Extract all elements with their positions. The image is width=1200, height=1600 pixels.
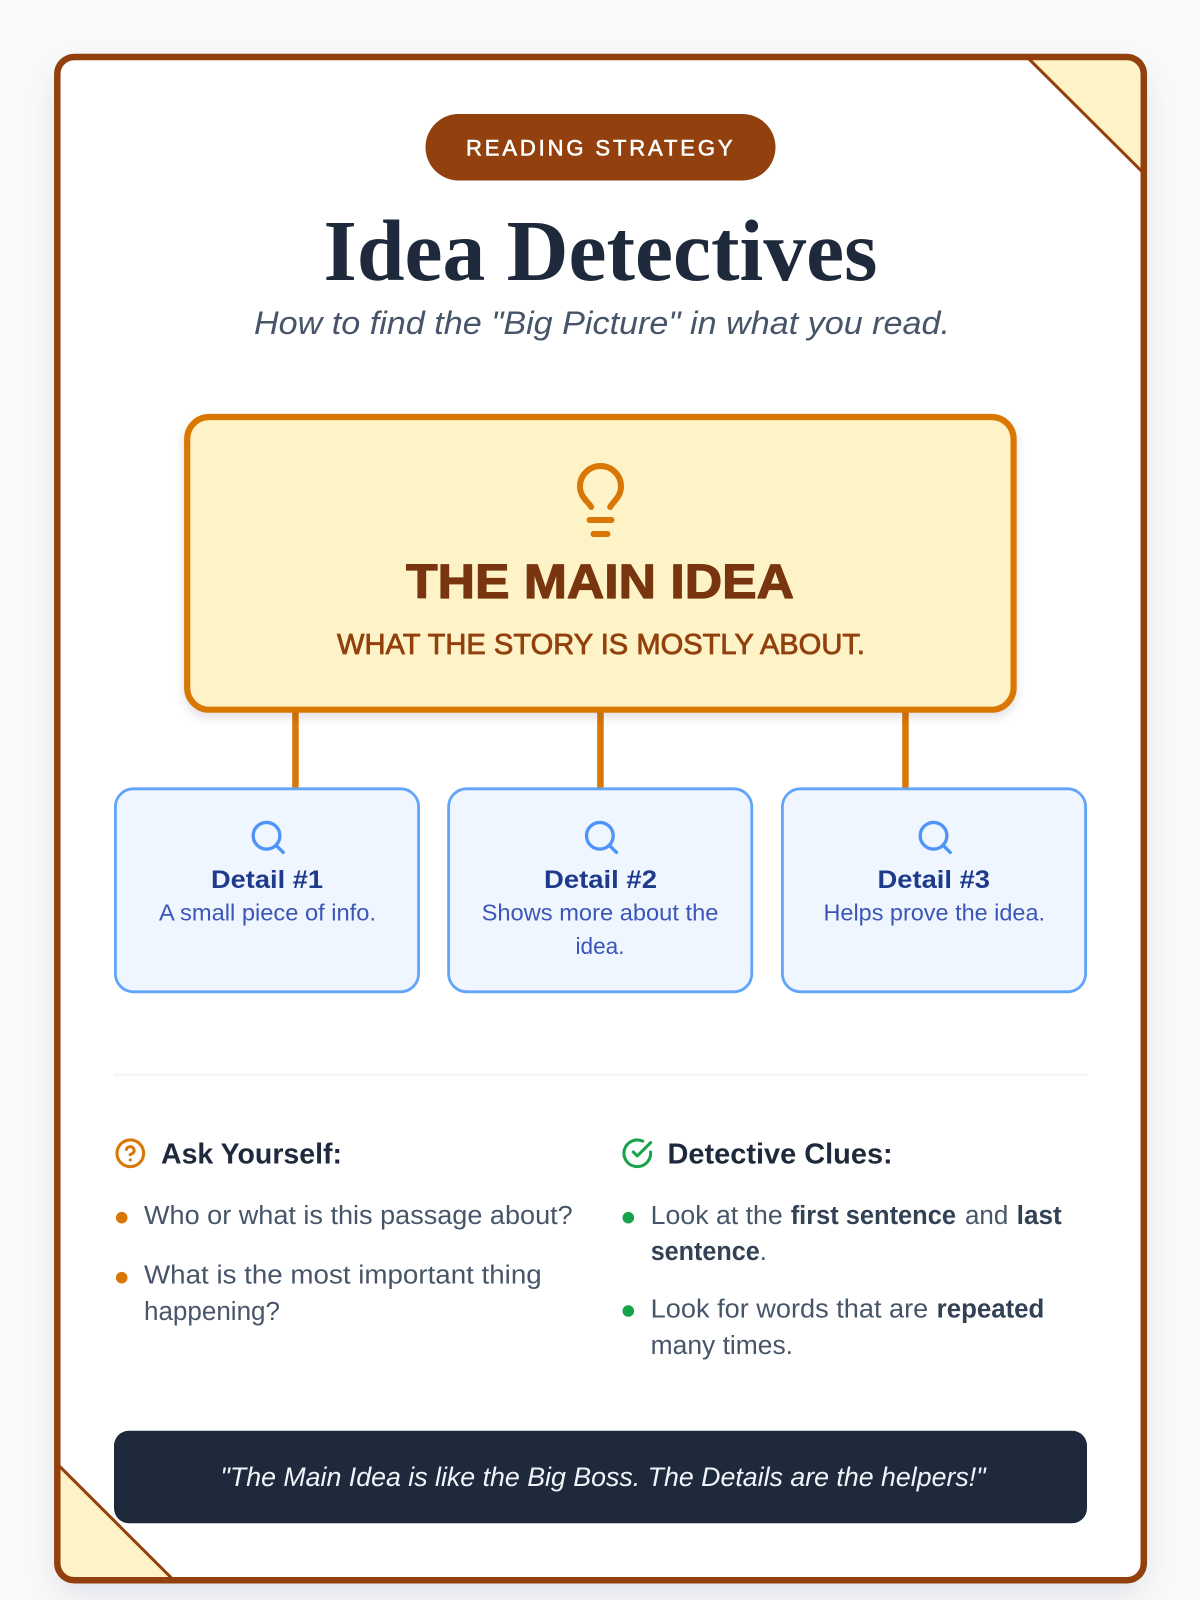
detail 2 text [482,900,718,959]
clues bullet 2: repeated [937,1295,1044,1323]
icon: check circle [624,1140,651,1167]
clues bullet 2: Look for words that are [651,1295,928,1323]
clues bullet 1: Look at the [651,1202,783,1230]
icon: lightbulb [580,466,621,534]
icon: magnifier 2 [587,822,617,852]
detail 2 text: Shows more about the [482,900,718,926]
detail 1 heading: Detail #1 [211,866,323,894]
ask yourself bullet 2: What is the most important thing [144,1261,542,1289]
detail 3 heading: Detail #3 [878,866,990,894]
panel: detail 1 [115,789,419,992]
icon: magnifier 1 [253,822,283,852]
detail 1 text: A small piece of info. [159,900,376,926]
clues bullet 2 [622,1295,1044,1360]
clues bullet 2: many times. [651,1332,793,1360]
clues bullet 1: sentence [651,1238,760,1266]
clues bullet 1: first sentence [791,1202,956,1230]
connector lines [292,710,909,790]
ask yourself bullet 2: happening? [144,1298,280,1326]
title: Idea Detectives [324,202,878,299]
corner: bottom left [58,1465,174,1580]
detail 3 text: Helps prove the idea. [824,900,1045,926]
icon: question circle [117,1140,144,1167]
ask yourself heading: Ask Yourself: [161,1138,342,1170]
main idea heading: THE MAIN IDEA [406,556,794,609]
badge: reading strategy [426,114,776,180]
panel: main idea [187,417,1014,710]
detective clues heading: Detective Clues: [668,1138,893,1170]
clues bullet 1: and [965,1202,1008,1230]
ask yourself bullet 2 [116,1261,542,1326]
clues bullet 1 [622,1202,1062,1266]
subtitle: How to find the "Big Picture" in what you read. [254,305,950,341]
quote banner [114,1431,1087,1523]
panel: detective clues [622,1138,1062,1360]
clues bullet 1: last [1017,1202,1062,1230]
detail 2 heading: Detail #2 [544,866,657,894]
panel: detail 2 [449,789,752,992]
icon: magnifier 3 [920,822,950,852]
panel: detail 3 [782,789,1086,992]
corner: top right [1028,58,1143,172]
clues bullet 1: . [760,1238,767,1266]
main idea description: WHAT THE STORY IS MOSTLY ABOUT. [337,629,865,661]
quote banner: "The Main Idea is like the Big Boss. The Details are the helpers!" [220,1462,987,1492]
detail 2 text: idea. [576,933,624,959]
panel: ask yourself [116,1138,573,1326]
badge: reading strategy: READING STRATEGY [466,136,733,160]
ask yourself bullet 1: Who or what is this passage about? [144,1202,573,1230]
